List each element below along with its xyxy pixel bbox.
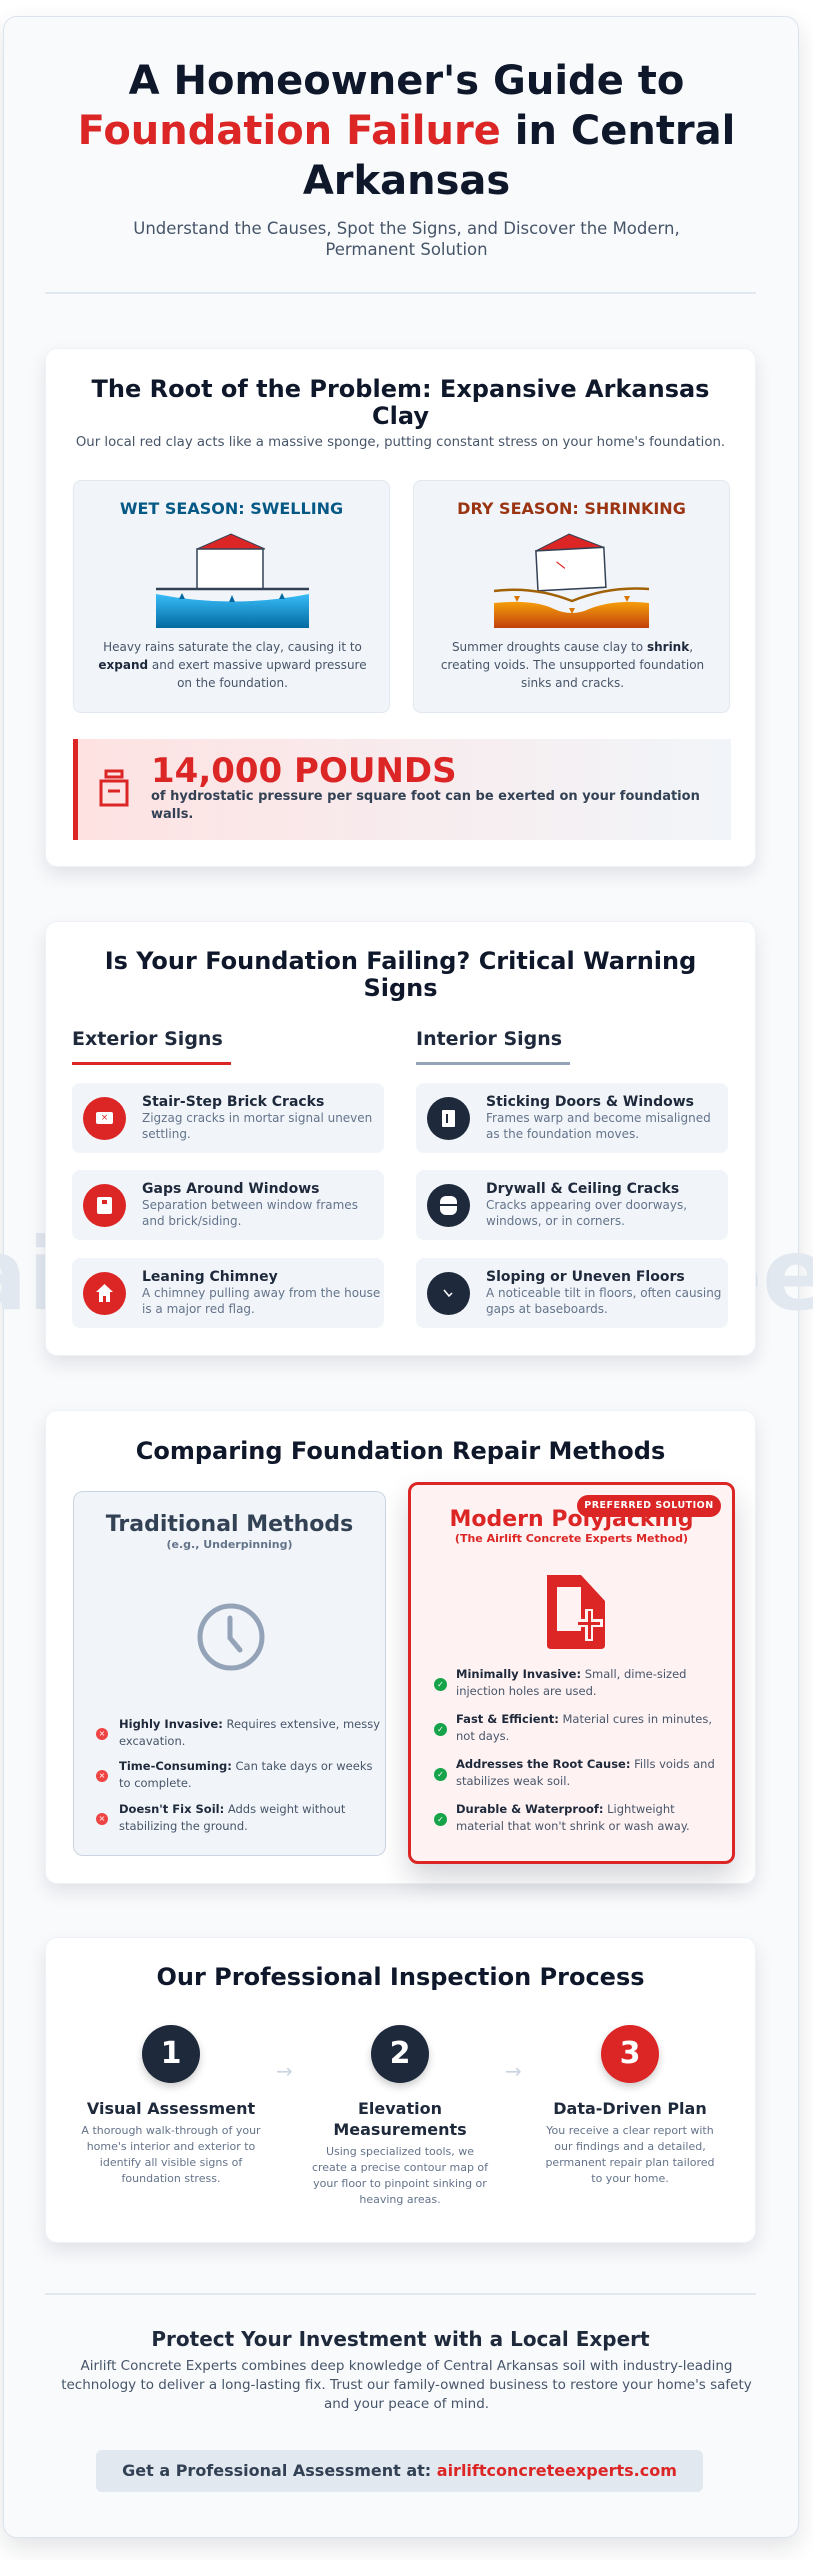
footer text: Airlift Concrete Experts combines deep knowledge of Central Arkansas soil with industry-leading technology to deliver a long-lasting fix. Trust our family-owned business to restore your home's safety and your peace of mind.	[61, 2358, 752, 2412]
subpanel: dry season: Summer droughts cause clay to shrink, creating voids. The unsupported foundation sinks and cracks.	[441, 640, 704, 690]
list: modern benefits: ✓	[437, 1815, 444, 1824]
sign: sloping floors: A noticeable tilt in floors, often causing gaps at baseboards.	[486, 1286, 721, 1316]
subtitle: Permanent Solution	[325, 240, 488, 259]
list: traditional cons: ×	[99, 1771, 105, 1780]
icon: weight	[100, 770, 128, 806]
list: traditional cons: Highly Invasive: Requires extensive, messy excavation.	[119, 1717, 380, 1748]
sign: stair-step cracks	[72, 1083, 384, 1153]
subpanel: wet season: Heavy rains saturate the clay, causing it to expand and exert massive upward pressure on the foundation.	[98, 640, 367, 690]
step 3: 3	[620, 2036, 640, 2071]
heading	[105, 947, 696, 1002]
sign: sticking doors	[416, 1083, 728, 1153]
arrow: →	[505, 2059, 522, 2083]
sign: sloping floors: Sloping or Uneven Floors	[486, 1269, 685, 1285]
step 1: A thorough walk-through of your home's interior and exterior to identify all visible signs of foundation stress.	[81, 2124, 261, 2185]
step 2: Using specialized tools, we create a precise contour map of your floor to pinpoint sinking or heaving areas.	[312, 2145, 488, 2206]
footer heading: Protect Your Investment with a Local Expert	[151, 2327, 650, 2351]
subtitle: Understand the Causes, Spot the Signs, and Discover the Modern,	[133, 219, 680, 238]
step 3	[545, 2025, 715, 2185]
step 2: Elevation	[358, 2099, 442, 2118]
panel: inspection process	[45, 1937, 756, 2243]
heading: Comparing Foundation Repair Methods	[136, 1437, 665, 1465]
badge: preferred solution	[577, 1495, 721, 1517]
badge: preferred solution: PREFERRED SOLUTION	[584, 1500, 714, 1511]
subpanel: wet season	[73, 480, 390, 713]
sign: sticking doors: Frames warp and become misaligned as the foundation moves.	[486, 1111, 711, 1141]
heading: Clay	[372, 402, 429, 430]
list: modern benefits: ✓	[437, 1680, 444, 1689]
sign: gaps windows: Gaps Around Windows	[142, 1181, 319, 1197]
list: modern benefits: Addresses the Root Cause: Fills voids and stabilizes weak soil.	[456, 1757, 715, 1788]
list: traditional cons: ×	[99, 1729, 105, 1738]
sign: drywall cracks: Drywall & Ceiling Cracks	[486, 1181, 679, 1197]
heading: Is Your Foundation Failing? Critical Warning	[105, 947, 696, 975]
sign: chimney: A chimney pulling away from the house is a major red flag.	[142, 1286, 380, 1316]
panel: warning signs	[45, 921, 756, 1356]
sign: chimney	[72, 1258, 384, 1328]
arrow: →	[276, 2059, 293, 2083]
panel: traditional: Traditional Methods	[106, 1512, 353, 1537]
panel: modern polyjacking	[408, 1482, 735, 1864]
step 2: Measurements	[333, 2120, 467, 2139]
sign: stair-step cracks: Zigzag cracks in mortar signal uneven settling.	[142, 1111, 372, 1141]
callout: 14,000 pounds	[73, 739, 731, 840]
list: traditional cons: ×	[99, 1814, 105, 1823]
sign: sloping floors	[416, 1258, 728, 1328]
subpanel: dry season: DRY SEASON: SHRINKING	[457, 499, 686, 518]
heading: Signs	[363, 974, 438, 1002]
step 2: 2	[390, 2036, 410, 2071]
list: traditional cons: Time-Consuming: Can take days or weeks to complete.	[119, 1759, 372, 1790]
icon: shrinking illustration	[494, 534, 650, 628]
list: modern benefits: Fast & Efficient: Material cures in minutes, not days.	[456, 1712, 712, 1743]
exterior heading: Exterior Signs	[72, 1028, 223, 1050]
sign: chimney: Leaning Chimney	[142, 1269, 278, 1285]
panel: root of the problem	[45, 348, 756, 867]
step 1: 1	[161, 2036, 181, 2071]
interior heading: Interior Signs	[416, 1028, 562, 1050]
sign: stair-step cracks: Stair-Step Brick Cracks	[142, 1094, 324, 1110]
title	[78, 58, 735, 204]
step 3: You receive a clear report with our findings and a detailed, permanent repair plan tailored to your home.	[545, 2124, 715, 2185]
call to action	[96, 2450, 703, 2492]
sign: sticking doors: Sticking Doors & Windows	[486, 1094, 694, 1110]
call to action: Get a Professional Assessment at: airliftconcreteexperts.com	[122, 2461, 677, 2480]
subpanel: dry season	[413, 480, 730, 713]
panel: comparing methods	[45, 1410, 756, 1884]
icon: document plus	[547, 1575, 605, 1649]
title: Arkansas	[303, 158, 510, 204]
callout: 14,000 pounds: 14,000 POUNDS	[151, 751, 457, 791]
title: A Homeowner's Guide to	[129, 58, 684, 104]
sign: drywall cracks	[416, 1170, 728, 1240]
panel: traditional: (e.g., Underpinning)	[166, 1538, 293, 1551]
step 1: Visual Assessment	[87, 2099, 255, 2118]
step 3: Data-Driven Plan	[553, 2099, 707, 2118]
step 1	[81, 2025, 261, 2185]
heading: The Root of the Problem: Expansive Arkansas	[92, 375, 709, 403]
step 2	[312, 2025, 488, 2206]
title: Foundation Failure in Central	[78, 108, 735, 154]
sign: stair-step cracks: ×	[101, 1113, 108, 1123]
panel: modern polyjacking: Modern Polyjacking	[450, 1507, 693, 1532]
panel: traditional	[73, 1491, 386, 1856]
list: traditional cons	[96, 1717, 380, 1833]
list: modern benefits	[434, 1667, 715, 1833]
sign: gaps windows	[72, 1170, 384, 1240]
subtitle	[133, 219, 680, 259]
intro text: Our local red clay acts like a massive sponge, putting constant stress on your home's foundation.	[76, 435, 725, 450]
subpanel: wet season: WET SEASON: SWELLING	[120, 499, 343, 518]
heading	[92, 375, 709, 430]
icon: clock	[198, 1604, 264, 1670]
panel: modern polyjacking: (The Airlift Concrete Experts Method)	[455, 1532, 688, 1545]
list: traditional cons: Doesn't Fix Soil: Adds weight without stabilizing the ground.	[119, 1802, 345, 1833]
list: modern benefits: ✓	[437, 1725, 444, 1734]
list: modern benefits: Durable & Waterproof: Lightweight material that won't shrink or wash away.	[456, 1802, 690, 1833]
heading: Our Professional Inspection Process	[156, 1963, 645, 1991]
sign: gaps windows: Separation between window frames and brick/siding.	[142, 1198, 358, 1228]
sign: drywall cracks: Cracks appearing over doorways, windows, or in corners.	[486, 1198, 687, 1228]
list: modern benefits: Minimally Invasive: Small, dime-sized injection holes are used.	[456, 1667, 686, 1698]
icon: swelling illustration	[156, 534, 309, 628]
callout: 14,000 pounds: of hydrostatic pressure per square foot can be exerted on your foundation walls.	[151, 789, 700, 822]
list: modern benefits: ✓	[437, 1770, 444, 1779]
